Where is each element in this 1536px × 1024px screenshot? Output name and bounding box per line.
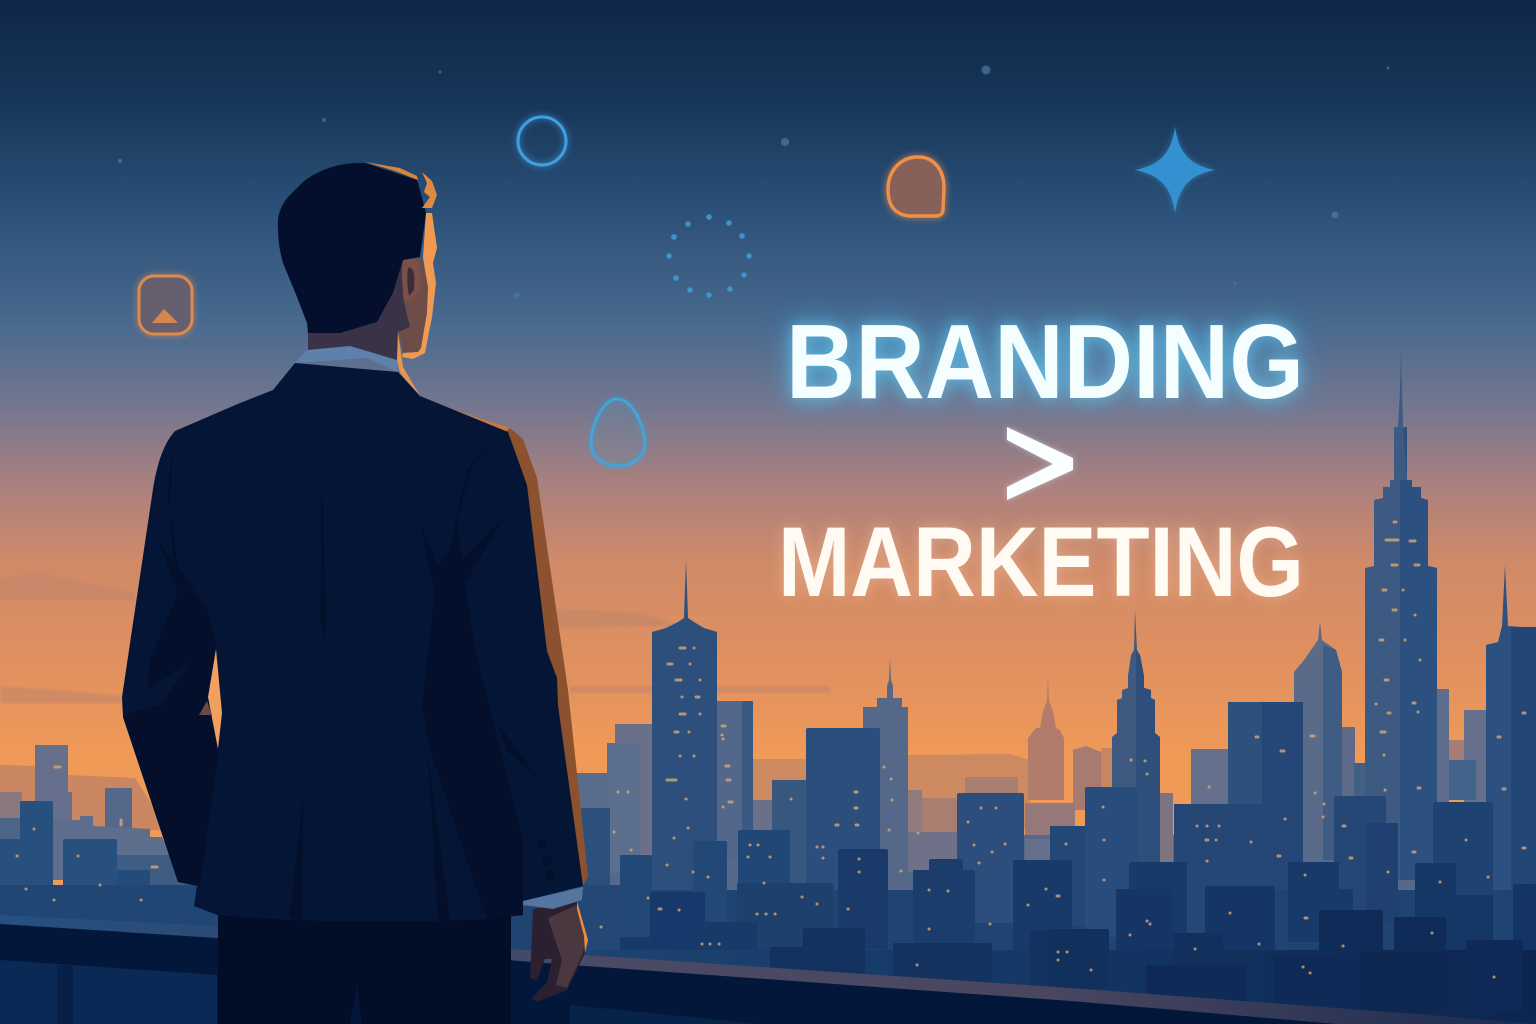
icon: orange rounded shape [888,157,944,216]
stars [118,66,1390,298]
icon: blue four-point star [1134,125,1216,215]
jacket right sleeve shadow [420,433,523,919]
headline glow [778,303,1304,617]
headline: Branding > Marketing [778,303,1304,617]
forelock [422,172,437,208]
tower: stepped [1112,610,1160,870]
symbol glow [1007,427,1073,500]
skyline: distant haze layer [0,672,1465,843]
railing post [57,965,73,1024]
sleeve buttons [537,839,555,880]
tower: right edge [1486,565,1536,900]
icon: blue circle [518,117,566,165]
word: MARKETING: MARKETING [778,506,1304,617]
ear [402,258,421,302]
symbol: greater than [1007,427,1073,500]
hair rim light [365,162,418,180]
jacket back vents [290,470,538,921]
headline glow: BRANDING [786,303,1304,421]
neck [308,260,410,360]
tower: spire [1365,352,1437,880]
hidden hand glimpse [199,701,212,715]
gap between arm and torso [208,649,222,749]
railing lower panel right [570,1005,760,1024]
tower: central left [652,560,717,890]
businessman figure [122,162,588,1024]
skyline: tall blue towers [652,352,1536,907]
tower: right block [1228,702,1266,892]
city windows [17,522,1525,977]
headline glow: BRANDING [786,303,1304,421]
jacket [122,363,583,922]
skyline: foreground dark blocks [0,849,1536,1024]
face skin [398,257,428,353]
shirt cuff [523,887,583,909]
railing lower panel left [0,960,217,1024]
icon: blue egg outline [591,399,645,466]
clouds on horizon [0,572,830,703]
railing dark body [0,924,1336,1024]
trousers [218,905,511,1024]
shoulder rim highlight [403,392,510,432]
skyline: front blocks [0,787,1536,1024]
tower: wide block [806,728,880,898]
hand [530,901,588,1002]
railing lit top strip [0,915,1536,1024]
jacket rim light [403,393,588,886]
rooftop railing [0,915,1536,1024]
skyline: grey mid layer [0,622,1536,1024]
face rim light [402,213,437,359]
word: BRANDING: BRANDING [786,303,1304,421]
hair [278,163,426,333]
icon: dotted circle [666,214,752,298]
orange neck sliver [397,332,420,396]
shirt collar [295,346,398,372]
headline glow: MARKETING [778,506,1304,617]
jacket left sleeve shadow [123,443,218,886]
icon: orange square with triangle [139,276,192,334]
